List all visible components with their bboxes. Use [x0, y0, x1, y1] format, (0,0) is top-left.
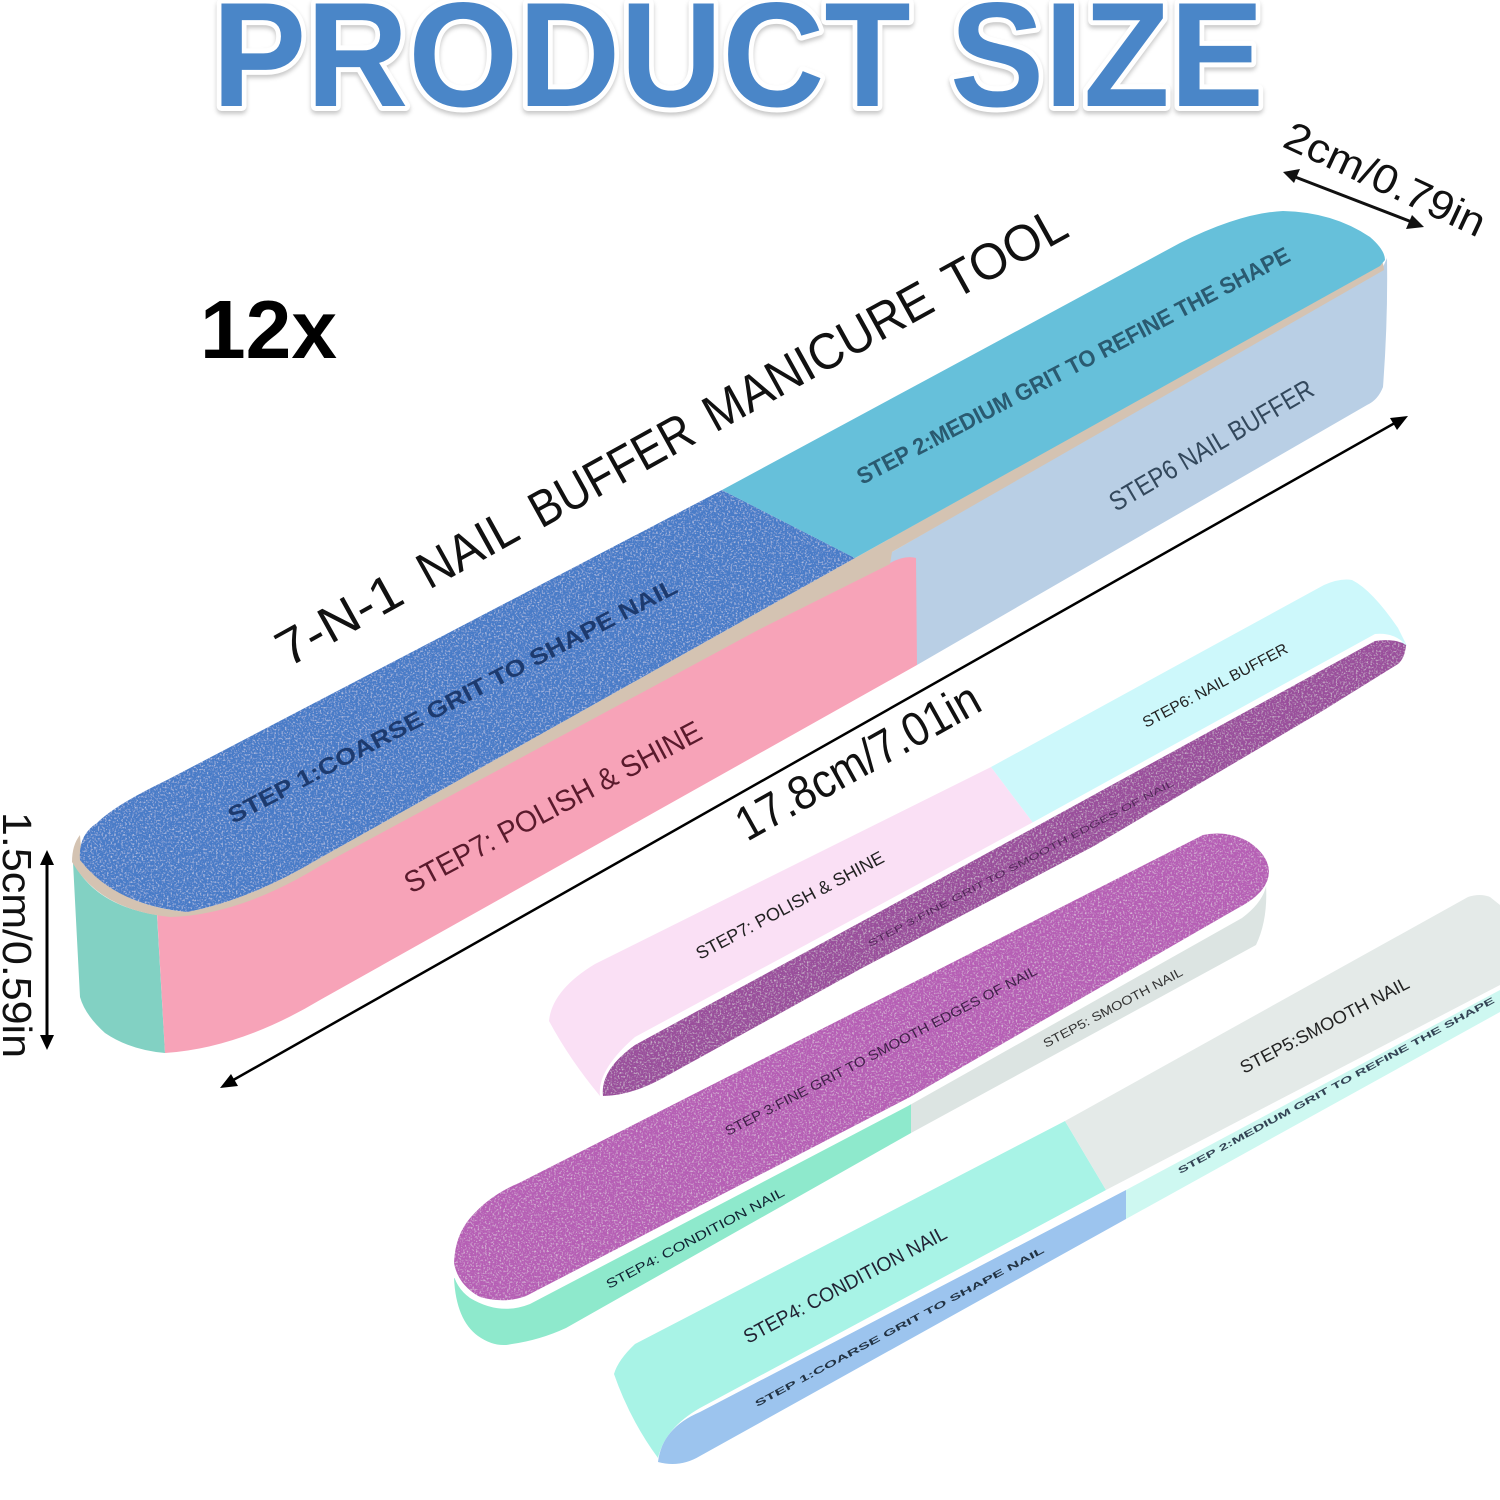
width label: 2cm/0.79in: [1277, 112, 1493, 246]
top face: blue: [80, 490, 855, 912]
top face: purple: [454, 834, 1269, 1300]
buffer: purple with green and grey side: [452, 834, 1269, 1345]
buffer: pink and cyan with purple side: [549, 580, 1407, 1096]
text: step 3 on side: STEP 3:FINE GRIT TO SMOOTH EDGES OF NAIL: [866, 778, 1176, 949]
product name label: NAIL: [407, 498, 528, 600]
width arrow: [1283, 169, 1424, 229]
large buffer block: [72, 211, 1387, 1053]
side face: grey: [911, 885, 1266, 1133]
top face: teal: [722, 211, 1385, 558]
text: step 6: STEP6 NAIL BUFFER: [1104, 374, 1319, 517]
top face: grey: [1065, 895, 1500, 1190]
text: step 5: STEP5: SMOOTH NAIL: [1041, 965, 1185, 1051]
side face: green: [454, 1098, 911, 1345]
layer strip: [72, 263, 1384, 917]
text: step 4: STEP4: CONDITION NAIL: [740, 1222, 951, 1348]
buffer: mint and grey with blue side: [614, 895, 1500, 1464]
text: step 1: STEP 1:COARSE GRIT TO SHAPE NAIL: [223, 573, 681, 828]
text: step 2: STEP 2:MEDIUM GRIT TO REFINE THE SHAPE: [852, 242, 1294, 489]
side face: pink: [157, 557, 917, 1053]
text: step 1: STEP 1:COARSE GRIT TO SHAPE NAIL: [753, 1244, 1047, 1409]
length arrow: [220, 416, 1408, 1088]
product name label: MANICURE: [693, 270, 942, 443]
side face: pale mint: [1126, 990, 1500, 1219]
white edge: [452, 880, 1267, 1309]
text: step 4: STEP4: CONDITION NAIL: [603, 1185, 787, 1292]
side face: light blue: [880, 258, 1387, 665]
text: step 7: STEP7: POLISH & SHINE: [399, 715, 707, 900]
product name label: [266, 195, 1077, 678]
side face: blue: [658, 1190, 1126, 1464]
purple face: [603, 640, 1406, 1096]
quantity label: 12x: [200, 283, 337, 376]
text: step 5: STEP5:SMOOTH NAIL: [1237, 973, 1413, 1078]
top face: pink: [549, 767, 1034, 1096]
height arrow: [40, 850, 54, 1050]
white edge: [600, 634, 1407, 1096]
text: step 6: STEP6: NAIL BUFFER: [1140, 640, 1291, 732]
product name label: BUFFER: [519, 402, 704, 539]
length label: 17.8cm/7.01in: [727, 673, 990, 852]
text: step 7: STEP7: POLISH & SHINE: [692, 847, 887, 964]
text: step 2: STEP 2:MEDIUM GRIT TO REFINE THE SHAPE: [1176, 995, 1496, 1176]
text: step 3: STEP 3:FINE GRIT TO SMOOTH EDGES OF NAIL: [722, 963, 1040, 1139]
product name label: TOOL: [933, 195, 1077, 310]
end face: green: [73, 862, 165, 1053]
top face: mint: [614, 1121, 1106, 1458]
top face: cyan: [991, 580, 1407, 824]
product name label: 7-N-1: [266, 562, 412, 678]
